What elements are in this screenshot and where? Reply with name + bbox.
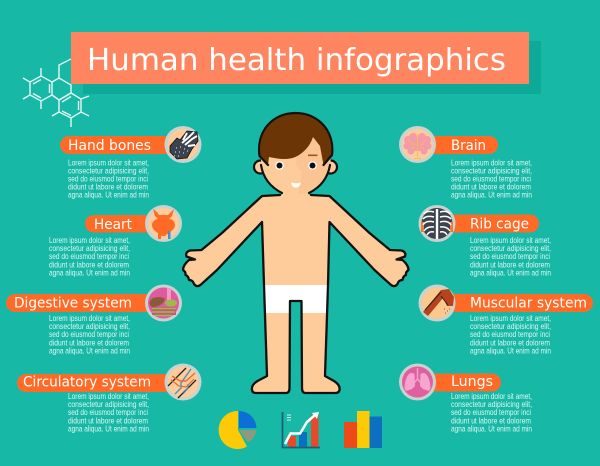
text block: didunt ut labore et dolorem: [470, 259, 550, 269]
text block: agna aliqua. Ut enim ad min: [451, 190, 532, 200]
text block: Lorem ipsum dolor sit amet,: [470, 235, 551, 245]
panel: brain: Brain: [451, 138, 486, 154]
bar chart: [344, 411, 382, 448]
text block: Lorem ipsum dolor sit amet,: [49, 313, 130, 323]
text block: consectetur adipisicing elit,: [470, 243, 551, 253]
face: [261, 122, 330, 193]
character: human body: [183, 113, 408, 393]
text block: consectetur adipisicing elit,: [49, 321, 130, 331]
panel: digestive system: [6, 284, 182, 355]
text block: didunt ut labore et dolorem: [470, 337, 550, 347]
eyes: [275, 161, 284, 170]
panel: hand bones: [60, 126, 202, 200]
text block: consectetur adipisicing elit,: [451, 165, 532, 175]
text block: consectetur adipisicing elit,: [451, 399, 532, 409]
underpants: [264, 285, 328, 313]
hair: [259, 113, 332, 165]
panel: lungs: [399, 364, 532, 433]
text block: [451, 157, 532, 200]
text block: didunt ut labore et dolorem: [49, 259, 129, 269]
pie chart: [219, 411, 256, 449]
text block: sed do eiusmod tempor inci: [470, 329, 550, 339]
text block: Lorem ipsum dolor sit amet,: [68, 391, 149, 401]
panel: muscular system: [418, 284, 593, 355]
text block: [470, 235, 551, 277]
title banner: [71, 32, 541, 94]
smile: [291, 182, 301, 188]
text block: didunt ut labore et dolorem: [68, 415, 148, 425]
text block: Lorem ipsum dolor sit amet,: [451, 157, 532, 167]
text block: sed do eiusmod tempor inci: [49, 251, 129, 261]
text block: consectetur adipisicing elit,: [470, 321, 551, 331]
title banner: Human health infographics: [87, 43, 506, 78]
panel: brain: [399, 126, 532, 200]
icon: lungs: [399, 364, 436, 400]
panel: lungs: Lungs: [451, 374, 493, 390]
text block: agna aliqua. Ut enim ad min: [68, 190, 149, 200]
text block: Lorem ipsum dolor sit amet,: [470, 313, 551, 323]
neck: [282, 180, 309, 197]
text block: sed do eiusmod tempor inci: [68, 174, 148, 184]
eyebrow: [308, 154, 318, 156]
text block: didunt ut labore et dolorem: [451, 415, 531, 425]
text block: didunt ut labore et dolorem: [49, 337, 129, 347]
icon: molecule: [23, 59, 89, 127]
text block: consectetur adipisicing elit,: [68, 165, 149, 175]
text block: sed do eiusmod tempor inci: [470, 251, 550, 261]
icon: digestive: [145, 284, 182, 322]
text block: consectetur adipisicing elit,: [68, 399, 149, 409]
text block: sed do eiusmod tempor inci: [49, 329, 129, 339]
text block: Lorem ipsum dolor sit amet,: [49, 235, 130, 245]
panel: muscular system: Muscular system: [470, 296, 587, 312]
panel: rib cage: Rib cage: [470, 216, 529, 232]
text block: [451, 391, 532, 433]
panel: digestive system: Digestive system: [14, 296, 132, 312]
text block: didunt ut labore et dolorem: [68, 182, 148, 192]
text block: Lorem ipsum dolor sit amet,: [451, 391, 532, 401]
text block: [68, 157, 149, 200]
text block: didunt ut labore et dolorem: [451, 182, 531, 192]
icon: hand bones: [164, 126, 202, 163]
text block: agna aliqua. Ut enim ad min: [470, 267, 551, 277]
panel: circulatory system: Circulatory system: [23, 374, 151, 390]
text block: agna aliqua. Ut enim ad min: [470, 345, 551, 355]
text block: [68, 391, 149, 433]
ears: [254, 160, 267, 174]
icon: rib cage: [418, 205, 456, 242]
text block: [49, 235, 130, 277]
line chart: [282, 412, 320, 448]
text block: agna aliqua. Ut enim ad min: [451, 423, 532, 433]
text block: agna aliqua. Ut enim ad min: [49, 345, 130, 355]
text block: agna aliqua. Ut enim ad min: [49, 267, 130, 277]
text block: sed do eiusmod tempor inci: [451, 407, 531, 417]
icon: brain: [399, 126, 436, 163]
icon: circulatory: [164, 364, 202, 400]
text block: agna aliqua. Ut enim ad min: [68, 423, 149, 433]
text block: sed do eiusmod tempor inci: [451, 174, 531, 184]
text block: consectetur adipisicing elit,: [49, 243, 130, 253]
text block: [49, 313, 130, 355]
panel: heart: Heart: [94, 217, 132, 233]
text block: Lorem ipsum dolor sit amet,: [68, 157, 149, 167]
panel: circulatory system: [17, 364, 202, 433]
text block: [470, 313, 551, 355]
panel: rib cage: [418, 205, 551, 277]
text block: sed do eiusmod tempor inci: [68, 407, 148, 417]
icon: heart: [145, 205, 182, 242]
panel: heart: [49, 205, 182, 277]
icon: muscular: [418, 284, 456, 322]
panel: hand bones: Hand bones: [68, 138, 151, 154]
